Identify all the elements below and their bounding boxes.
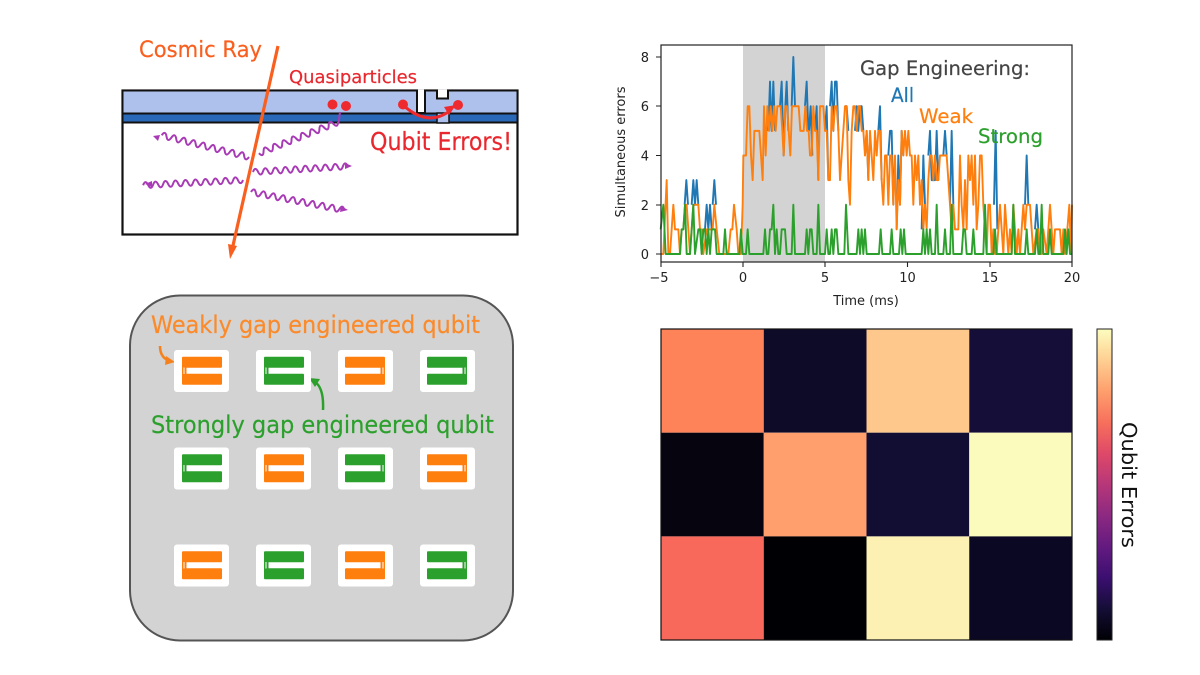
x tick labels	[649, 271, 1080, 286]
label: Qubit Errors: Qubit Errors!	[370, 127, 512, 156]
series: weak	[661, 106, 1072, 254]
x tick labels: 5	[821, 271, 829, 286]
arrow: strong qubit pointer	[309, 378, 323, 410]
y tick labels: 8	[641, 51, 649, 66]
qubit grid	[174, 350, 475, 586]
y tick labels: 2	[641, 199, 649, 214]
phonon arrowheads	[145, 135, 352, 212]
label: Cosmic Ray: Cosmic Ray	[139, 38, 262, 63]
shaded event window	[743, 45, 825, 262]
junction gap	[417, 90, 425, 113]
chip background	[130, 296, 513, 640]
arrow: weak qubit pointer	[160, 346, 175, 365]
label: Quasiparticles: Quasiparticles	[289, 68, 417, 88]
tunneling arrow	[403, 105, 456, 118]
axis ticks	[656, 57, 1072, 267]
junction bridge	[437, 113, 449, 123]
colorbar label: Qubit Errors	[1117, 422, 1141, 548]
superconducting film layer	[122, 90, 518, 114]
y tick labels: 4	[641, 150, 649, 164]
qubit tiles row 3	[174, 544, 475, 586]
series: strong	[661, 205, 1072, 254]
panel: qubit chip	[130, 296, 513, 640]
label: strong qubit: Strongly gap engineered qubit	[151, 411, 494, 439]
y axis title: Simultaneous errors	[614, 86, 629, 218]
x tick labels: 0	[739, 271, 747, 286]
panel: cosmic ray cross-section diagram	[122, 38, 518, 259]
colorbar	[1097, 329, 1141, 640]
qubit tiles row 2	[174, 448, 475, 490]
x tick labels: 15	[982, 271, 998, 286]
legend: Strong: Strong	[978, 125, 1043, 148]
substrate	[122, 90, 518, 234]
cosmic ray arrow	[228, 46, 278, 259]
heatmap: qubit errors	[661, 329, 1072, 640]
y tick labels	[641, 51, 649, 263]
quasiparticle dots	[328, 100, 463, 111]
qubit tiles row 1	[174, 350, 475, 392]
series: all qubits peaks	[685, 57, 1038, 229]
y tick labels: 0	[641, 248, 649, 263]
legend: Weak: Weak	[919, 105, 974, 128]
line chart: simultaneous errors over time	[614, 45, 1080, 309]
label: weak qubit: Weakly gap engineered qubit	[151, 311, 480, 339]
axes frame	[661, 45, 1072, 262]
x tick labels: 10	[899, 271, 916, 286]
x axis title: Time (ms)	[832, 294, 899, 309]
x tick labels: 20	[1064, 271, 1080, 286]
phonon waves	[143, 112, 348, 213]
legend title: Gap Engineering:	[860, 57, 1030, 80]
legend: All: All	[891, 84, 914, 107]
x tick labels: −5	[649, 271, 669, 286]
dark blue layer	[122, 114, 518, 122]
junction notch	[437, 90, 448, 98]
y tick labels: 6	[641, 100, 649, 115]
